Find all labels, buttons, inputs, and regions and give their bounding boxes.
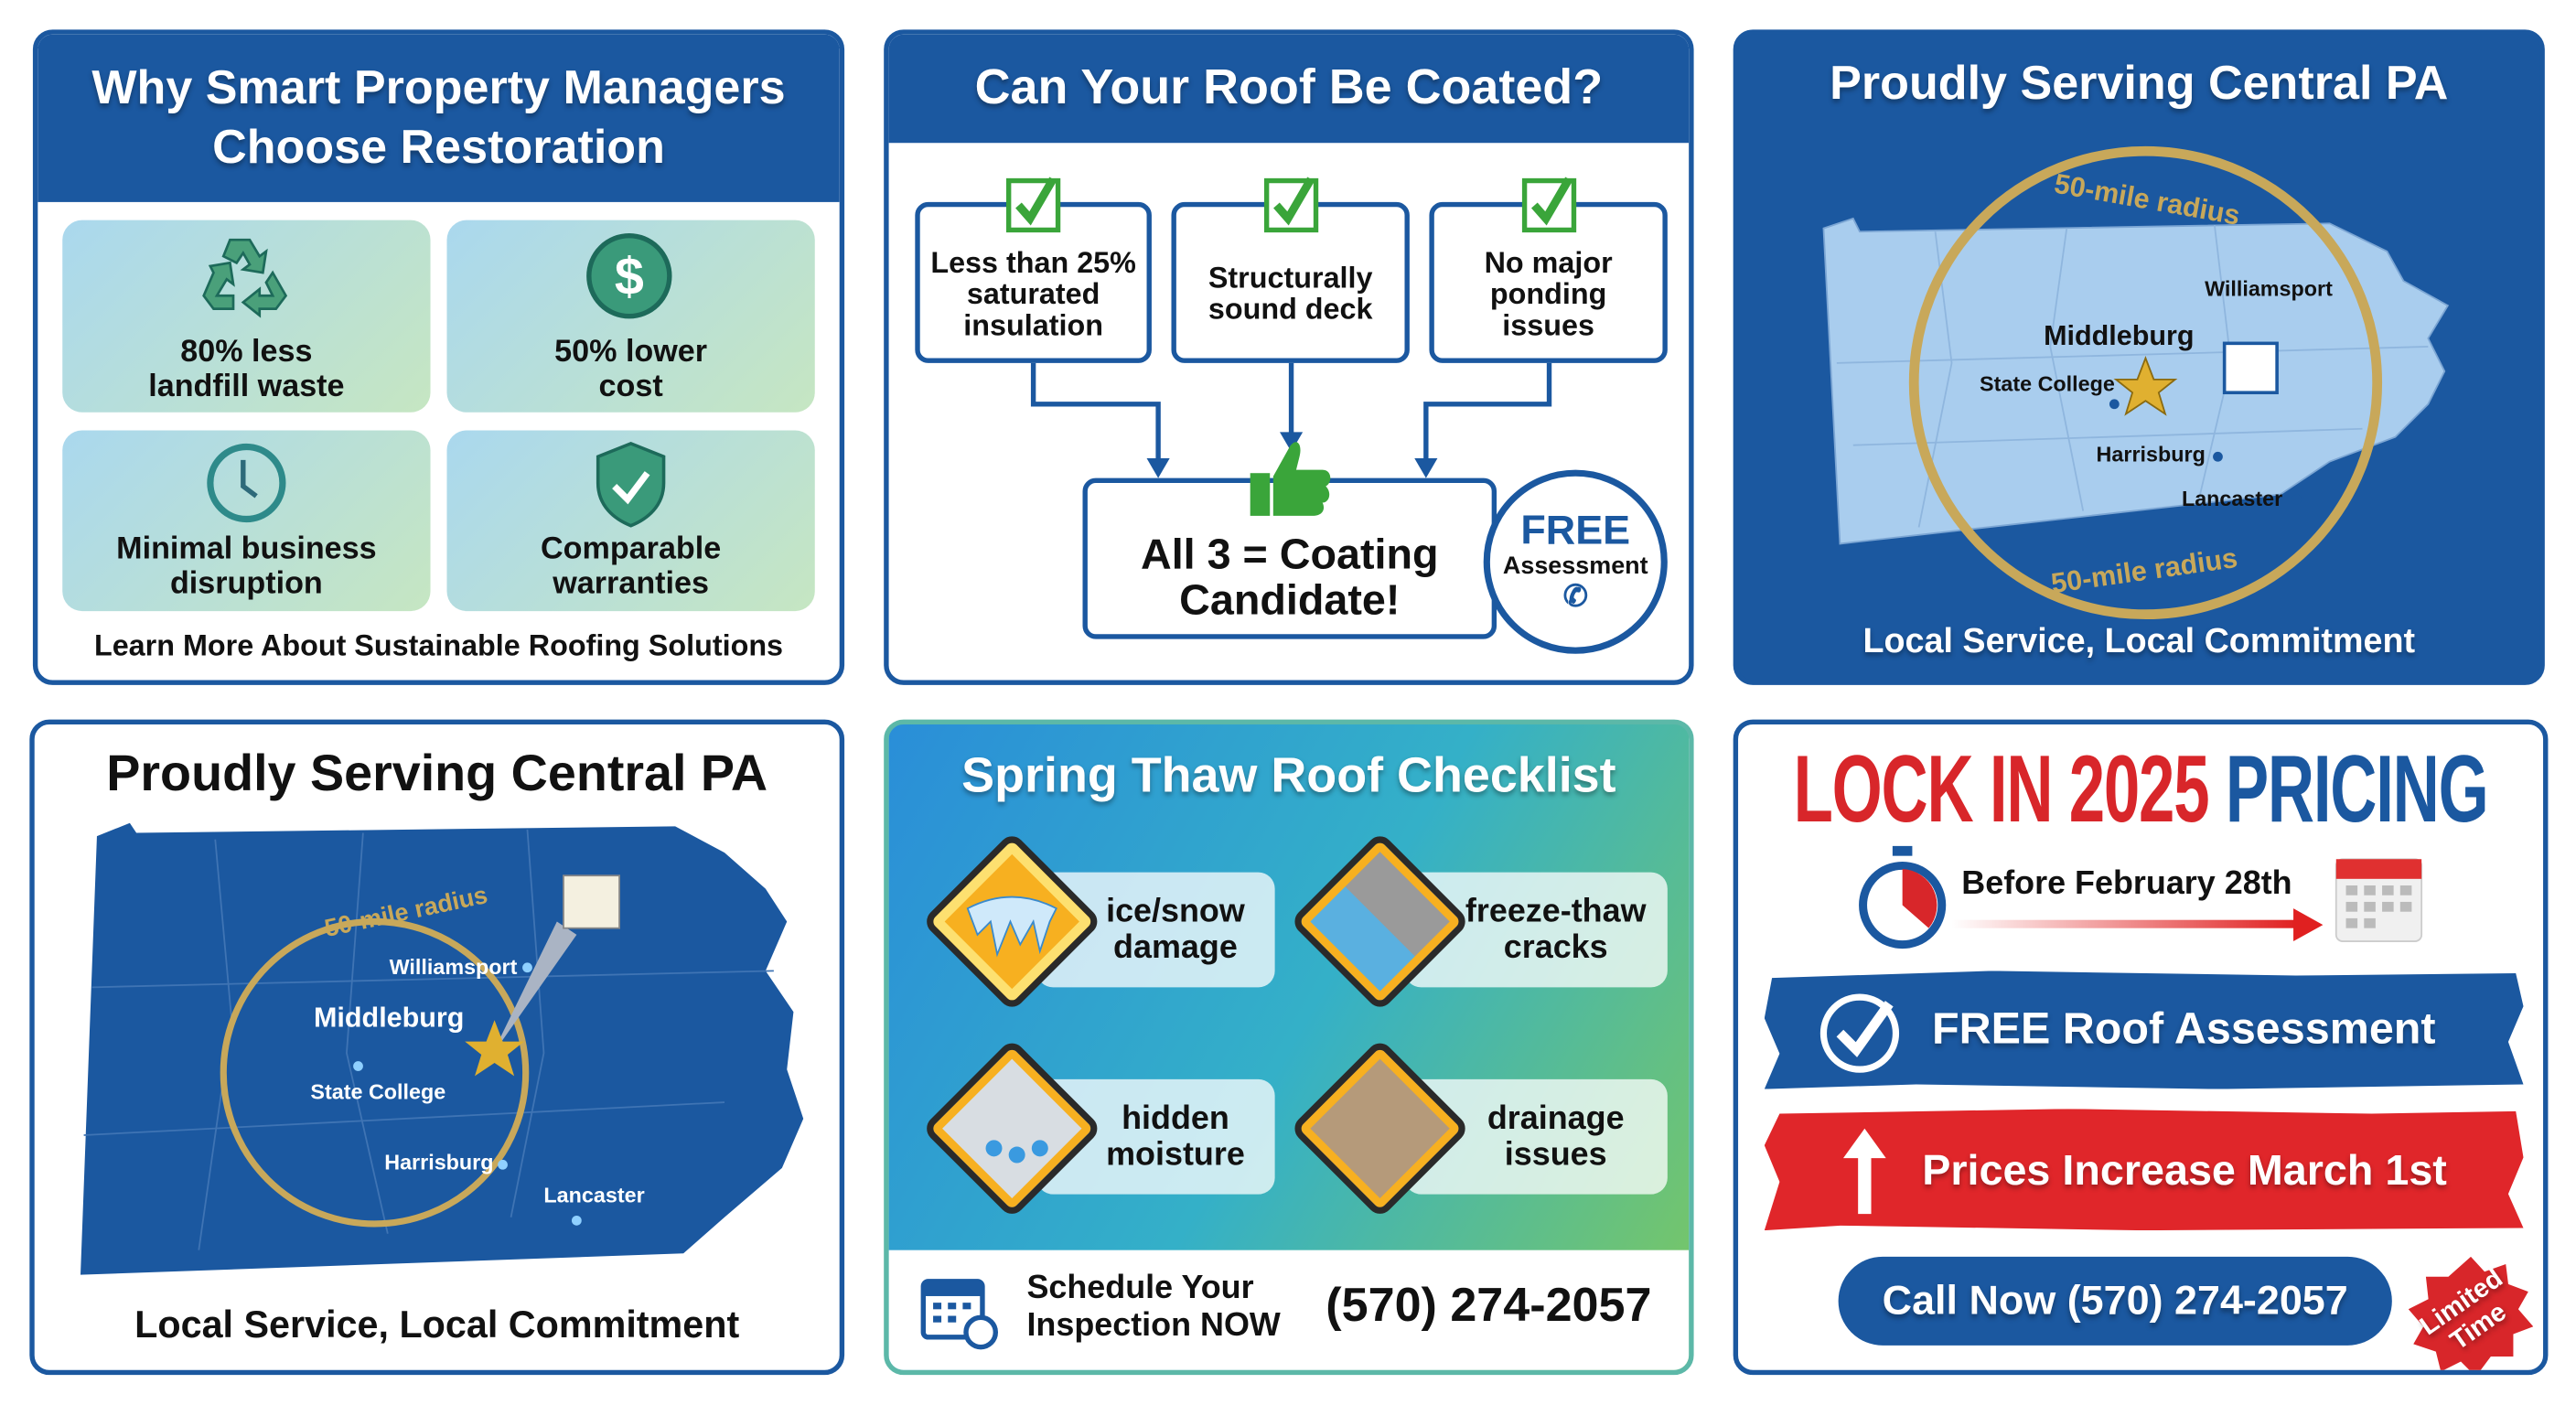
heading: Spring Thaw Roof Checklist <box>961 749 1616 803</box>
checkmarks <box>1006 177 1577 232</box>
map <box>1822 146 2449 619</box>
item: freeze-thaw: cracks <box>1504 929 1608 966</box>
heading: LOCK IN 2025 PRICING <box>1794 736 2487 842</box>
heading: Choose Restoration <box>212 122 665 174</box>
criterion 1: insulation <box>963 308 1103 341</box>
tile: cost: cost <box>599 370 663 404</box>
result box: All 3 = Coating <box>1141 529 1439 578</box>
tile: warranties: warranties <box>553 567 709 601</box>
panel: can your roof be coated <box>884 29 1694 685</box>
map: Harrisburg <box>2097 443 2206 467</box>
footer bar: (570) 274-2057 <box>1326 1280 1651 1332</box>
icon diamond <box>921 831 1102 1013</box>
badge: limited time: Time <box>2446 1298 2512 1357</box>
footer bar: Inspection NOW <box>1026 1308 1281 1344</box>
item: drainage <box>1294 1043 1668 1214</box>
heading: Can Your Roof Be Coated? <box>975 60 1603 115</box>
panel: spring thaw checklist <box>884 720 1694 1375</box>
item: freeze-thaw <box>1294 836 1668 1007</box>
icon: calendar <box>920 1279 998 1350</box>
badge: free assessment <box>1484 470 1668 654</box>
heading: Proudly Serving Central PA <box>106 745 767 801</box>
item: drainage: drainage <box>1487 1100 1625 1137</box>
item: freeze-thaw: freeze-thaw <box>1465 894 1647 929</box>
result box: Candidate! <box>1179 575 1400 624</box>
criterion 1: saturated <box>967 277 1100 310</box>
deadline row <box>1859 845 2422 949</box>
map <box>80 823 803 1275</box>
icon: dollar <box>586 233 672 318</box>
criterion 1 <box>915 202 1152 363</box>
criterion 3 <box>1429 202 1668 363</box>
map: State College <box>1980 371 2115 395</box>
criterion 1: Less than 25% <box>930 245 1136 278</box>
icon: shield <box>596 442 666 528</box>
tile: landfill: landfill waste <box>148 370 345 404</box>
criterion 3: ponding <box>1490 277 1606 310</box>
panel: serving central PA (white) <box>29 720 844 1375</box>
map: Harrisburg <box>384 1151 494 1174</box>
item: hidden moisture: moisture <box>1106 1137 1245 1173</box>
criterion 2 <box>1171 202 1410 363</box>
icon: calendar <box>2334 858 2422 942</box>
item: ice/snow: ice/snow <box>1106 894 1245 929</box>
item: ice/snow <box>927 836 1275 1007</box>
criterion 3: issues <box>1502 308 1594 341</box>
map: Middleburg <box>314 1002 464 1033</box>
criterion 2: Structurally <box>1208 262 1373 294</box>
criterion 2: sound deck <box>1208 293 1373 326</box>
map: State College <box>310 1079 445 1103</box>
map: Williamsport <box>390 955 518 979</box>
tile: disruption <box>62 431 431 611</box>
item: hidden moisture <box>927 1043 1275 1214</box>
result box <box>1082 478 1497 639</box>
tile: cost: 50% lower <box>554 335 707 370</box>
call button: Call Now (570) 274-2057 <box>1883 1278 2348 1324</box>
map: Lancaster <box>543 1184 645 1207</box>
badge: limited time <box>2409 1257 2534 1370</box>
badge: limited time: Limited <box>2416 1265 2508 1341</box>
item: drainage: issues <box>1505 1137 1607 1173</box>
panel: lock in pricing <box>1733 720 2548 1375</box>
banner: free assessment: FREE Roof Assessment <box>1932 1003 2436 1053</box>
map: 50-mile radius <box>322 881 489 942</box>
deadline row: Before February 28th <box>1961 865 2292 902</box>
connectors <box>1030 362 1551 477</box>
item: hidden moisture: hidden <box>1122 1100 1229 1137</box>
badge: free assessment: Assessment <box>1503 552 1648 580</box>
banner: free assessment <box>1765 971 2524 1089</box>
tile: landfill <box>62 220 431 413</box>
criterion 3: No major <box>1485 245 1613 278</box>
tile: disruption: disruption <box>170 567 323 601</box>
tile: landfill: 80% less <box>180 335 312 370</box>
heading <box>889 35 1689 143</box>
heading <box>38 35 840 202</box>
footer: Local Service, Local Commitment <box>134 1303 739 1346</box>
map: Williamsport <box>2205 276 2333 300</box>
panel: serving central PA (blue) <box>1733 29 2545 685</box>
map: 50-mile radius <box>2049 542 2239 599</box>
icon: recycle <box>202 238 287 318</box>
map: Lancaster <box>2182 487 2282 510</box>
footer bar <box>889 1250 1689 1370</box>
heading: Proudly Serving Central PA <box>1830 58 2448 110</box>
footer: Local Service, Local Commitment <box>1862 623 2415 660</box>
map: 50-mile radius <box>2052 168 2242 231</box>
call button <box>1839 1257 2392 1346</box>
tile: cost <box>446 220 815 413</box>
heading: Why Smart Property Managers <box>91 62 786 115</box>
banner: price increase: Prices Increase March 1st <box>1922 1145 2447 1195</box>
icon: stopwatch <box>1859 845 1947 949</box>
banner: price increase <box>1765 1109 2524 1230</box>
footer bar: Schedule Your <box>1026 1270 1254 1306</box>
footer link text: Learn More About Sustainable Roofing Solutions <box>94 629 783 662</box>
icon: thumbs up <box>1250 442 1330 516</box>
tile: disruption: Minimal business <box>116 532 377 567</box>
map: Middleburg <box>2044 320 2195 351</box>
icon: dollar: $ <box>615 246 644 306</box>
item: ice/snow: damage <box>1113 929 1238 966</box>
panel: why restoration <box>33 29 844 685</box>
icon: clock <box>207 443 285 523</box>
badge: free assessment: ✆ <box>1563 580 1588 613</box>
tile: warranties <box>446 431 815 611</box>
arrow <box>1964 908 2324 941</box>
tile: warranties: Comparable <box>541 532 721 567</box>
badge: free assessment: FREE <box>1520 508 1630 553</box>
